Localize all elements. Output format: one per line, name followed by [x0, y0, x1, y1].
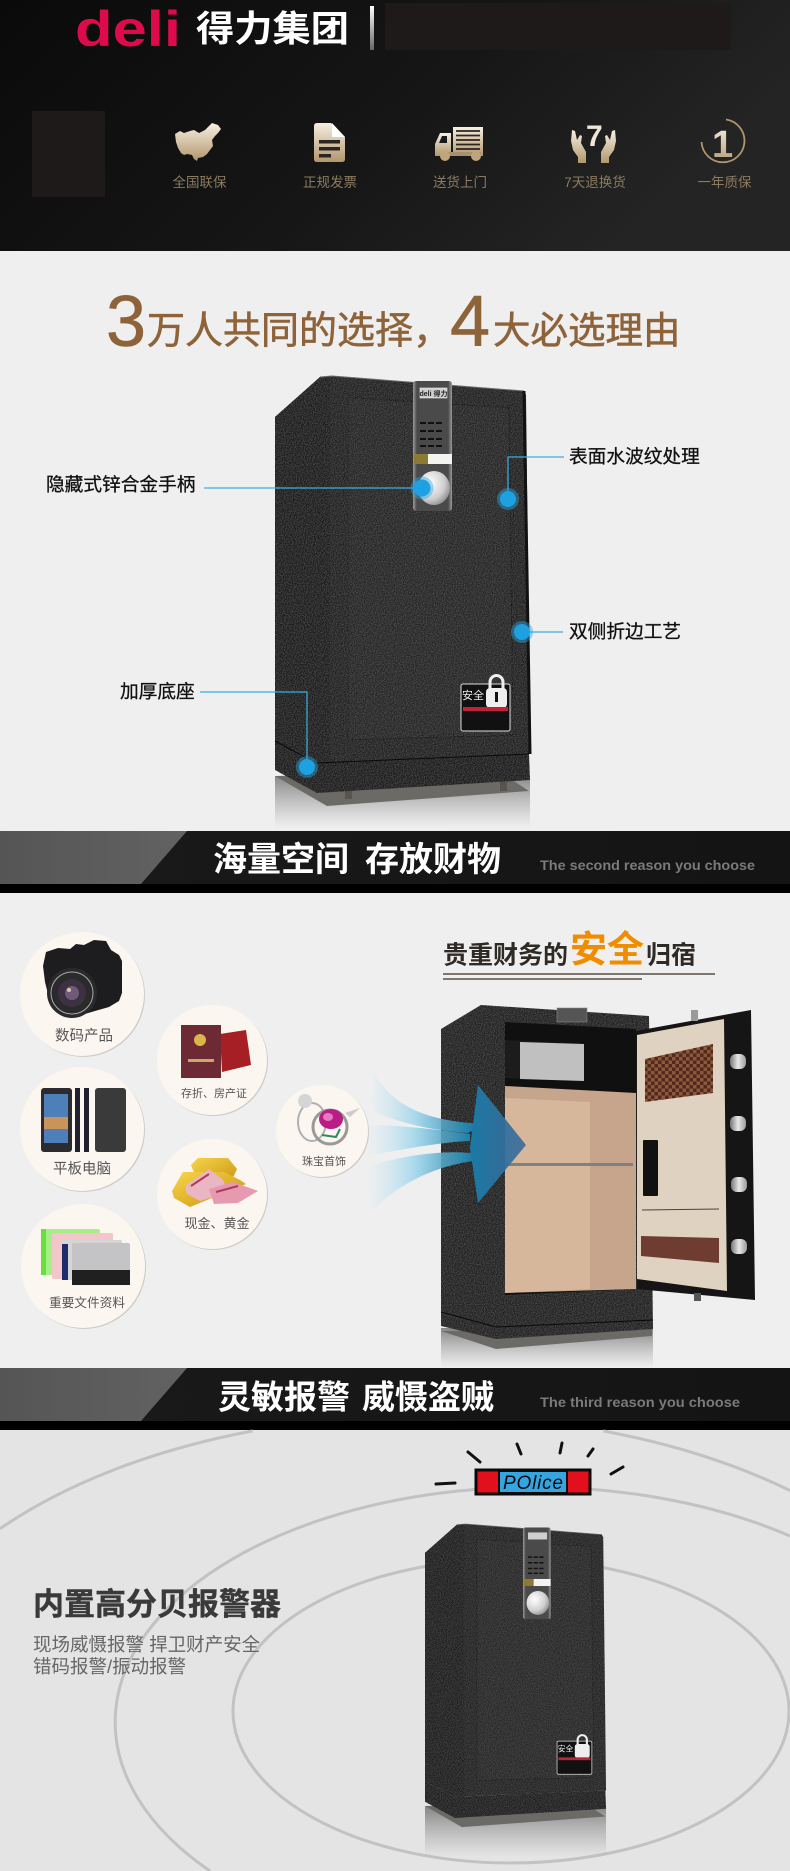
upper drawer [505, 1040, 584, 1081]
service: home delivery [433, 127, 487, 190]
banner: reason three: The third reason you choose [540, 1394, 740, 1410]
text block: alarm [33, 1587, 281, 1677]
banner: reason three: 威慑盗贼 [362, 1378, 494, 1416]
masked slogan block [385, 3, 731, 50]
item: cash and gold: 现金、黄金 [184, 1216, 250, 1231]
callout: hidden zinc alloy handle [46, 474, 434, 500]
text block: alarm: 错码报警/振动报警 [33, 1656, 186, 1677]
item: bankbooks and property certificates [157, 1005, 268, 1116]
logo divider [370, 6, 374, 50]
banner: reason two: 海量空间 [213, 841, 349, 879]
logo: company name: 得力集团 [196, 8, 349, 49]
callout: double folded edge [511, 621, 681, 643]
callout: double folded edge: 双侧折边工艺 [569, 621, 681, 642]
icon: camera [43, 940, 122, 1018]
service: 7-day return [564, 120, 626, 190]
icon: police light [436, 1443, 623, 1494]
service: 7-day return: 7 [586, 120, 603, 153]
door bolts [730, 1054, 747, 1254]
lock handle: deli 得力 [419, 389, 448, 398]
safety sticker [461, 676, 510, 731]
logo: deli: deli [75, 1, 181, 57]
item: jewellery [276, 1085, 369, 1178]
item: bankbooks and property certificates: 存折、房产证 [181, 1086, 247, 1100]
service: formal invoice [303, 123, 357, 190]
safety sticker: 安全 [462, 688, 484, 702]
heading: valuables home: 安全 [570, 929, 644, 970]
icon: police light: POlice [503, 1473, 563, 1494]
product: closed safe [275, 376, 530, 828]
open door [636, 1010, 755, 1300]
banner: reason three [0, 1368, 790, 1430]
banner: reason two: The second reason you choose [540, 857, 755, 873]
safe body [441, 1005, 653, 1339]
door panel [477, 1539, 594, 1781]
heading: reason one: 4 [450, 282, 490, 362]
callout: thick base [120, 681, 318, 778]
text block: alarm: 内置高分贝报警器 [33, 1587, 281, 1622]
heading: reason one: 大必选理由 [493, 310, 680, 352]
service: one-year warranty [698, 120, 752, 190]
heading: reason one: 万人共同的选择， [147, 310, 451, 352]
service: nationwide warranty: 全国联保 [172, 174, 227, 190]
service: 7-day return: 7天退换货 [564, 174, 626, 190]
masked left block [32, 111, 105, 197]
icon: gold bars and cash [172, 1158, 258, 1207]
banner: reason two [0, 831, 790, 893]
heading: valuables home: 归宿 [646, 942, 696, 970]
item: cash and gold [157, 1139, 268, 1250]
service: home delivery: 送货上门 [433, 174, 487, 190]
logo plate [557, 1008, 587, 1022]
service: nationwide warranty [172, 123, 227, 190]
safe body [275, 376, 530, 763]
safe interior [505, 1022, 636, 1295]
lock handle [413, 381, 452, 511]
safe base [275, 741, 530, 793]
item: tablet [20, 1067, 145, 1192]
callout: hidden zinc alloy handle: 隐藏式锌合金手柄 [46, 474, 196, 495]
item: important files [21, 1204, 146, 1329]
heading: reason one: 3 [106, 282, 146, 362]
heading: reason one [106, 282, 680, 362]
callout: thick base: 加厚底座 [120, 681, 195, 702]
callout: water ripple surface [497, 446, 700, 510]
banner: reason three: 灵敏报警 [218, 1378, 350, 1416]
product: alarm safe [425, 1524, 606, 1857]
door lower pad [641, 1236, 719, 1263]
item: tablet: 平板电脑 [53, 1160, 111, 1178]
icon: rings [298, 1094, 360, 1144]
safety sticker: 安全 [558, 1744, 574, 1754]
icon: tablet views [41, 1088, 126, 1152]
safe body [425, 1524, 606, 1797]
callout: water ripple surface: 表面水波纹处理 [569, 446, 700, 467]
panel: header [0, 0, 790, 251]
lock handle [523, 1528, 551, 1619]
sound wave rings [0, 1431, 790, 1871]
heading: valuables home: 贵重财务的 [443, 942, 568, 970]
service: formal invoice: 正规发票 [303, 175, 357, 190]
safety sticker [557, 1735, 592, 1774]
safe base [425, 1781, 606, 1818]
door top pad [645, 1044, 713, 1102]
text block: alarm: 现场威慑报警 捍卫财产安全 [33, 1634, 261, 1655]
service: one-year warranty: 一年质保 [698, 175, 752, 190]
icon: certificates [181, 1025, 251, 1078]
banner: reason two: 存放财物 [365, 841, 501, 879]
item: important files: 重要文件资料 [49, 1295, 125, 1310]
item: jewellery: 珠宝首饰 [302, 1154, 346, 1168]
product: open safe [441, 1005, 755, 1368]
arrow: into the safe [366, 1071, 526, 1212]
heading: valuables home [443, 929, 715, 980]
item: digital products: 数码产品 [55, 1028, 113, 1044]
icon: file folders [41, 1229, 130, 1285]
service: one-year warranty: 1 [712, 124, 733, 166]
door panel [348, 398, 513, 740]
item: digital products [20, 932, 145, 1057]
